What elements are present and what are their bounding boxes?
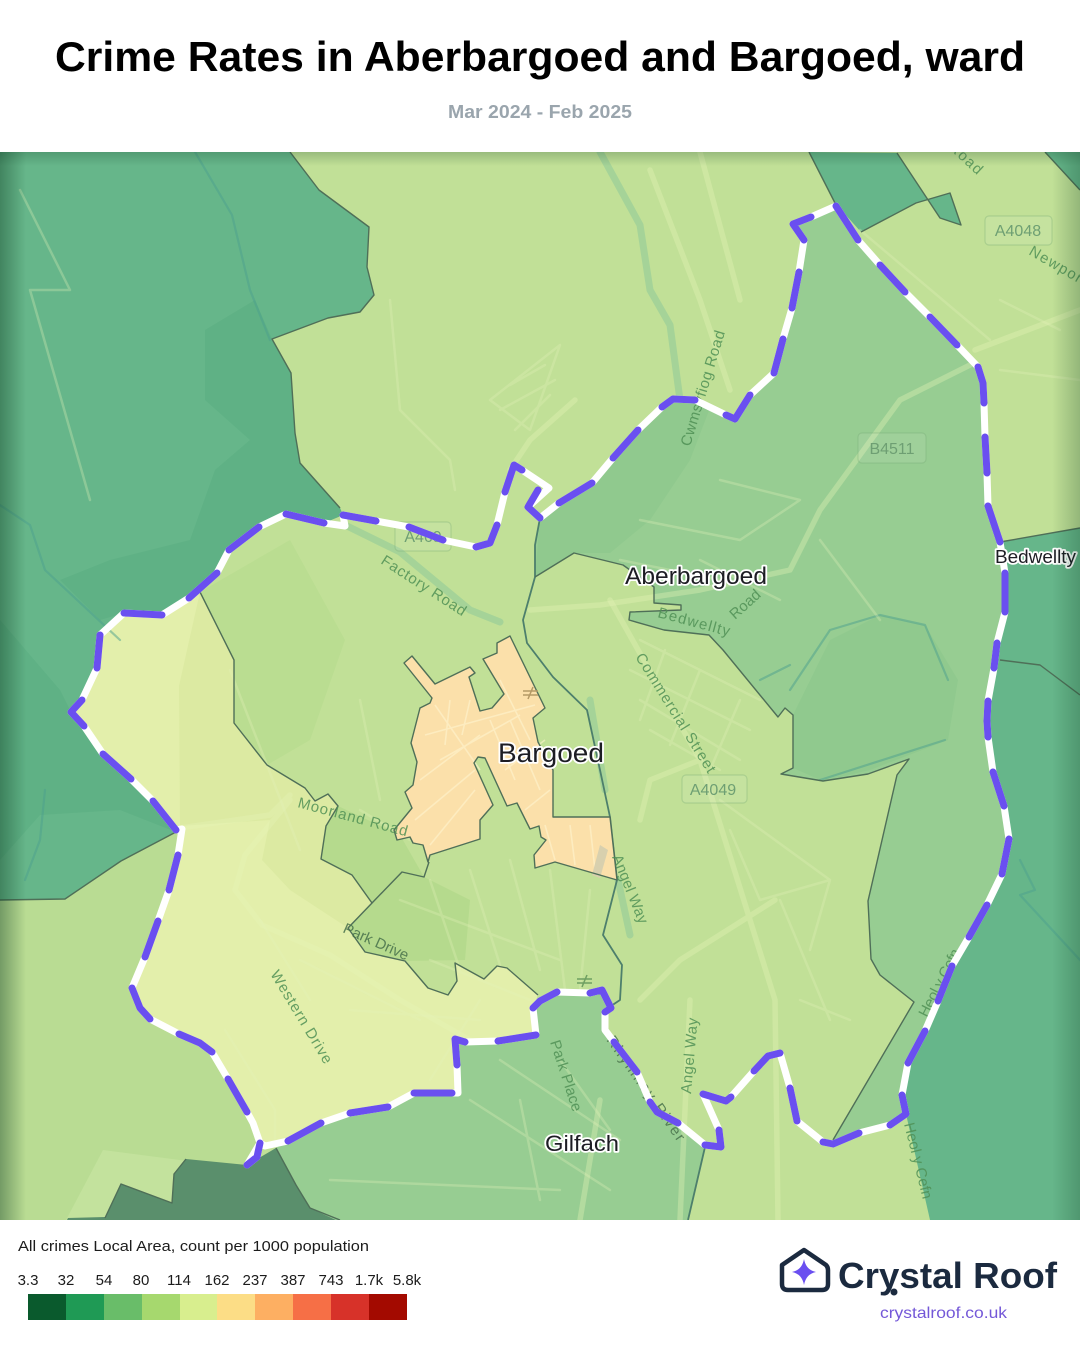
choropleth area: west pale ward [71, 592, 538, 1146]
road shield: A4049 [682, 775, 747, 803]
road network [20, 152, 1080, 1220]
road shield: B4511: B4511 [869, 441, 915, 458]
road labels: Commercial Street [632, 650, 720, 777]
choropleth area: top right woodland [809, 152, 1080, 232]
legend tick labels: 5.8k [393, 1272, 422, 1289]
legend tick labels: 80 [133, 1272, 149, 1289]
road labels [267, 138, 1080, 1201]
subtitle: date range: Mar 2024 - Feb 2025 [448, 102, 632, 122]
logo y-tail key ring [890, 1288, 898, 1296]
choropleth area: Aberbargoed ward [535, 206, 1009, 1140]
road labels: Park Drive [340, 920, 411, 964]
road labels: Angel Way [608, 852, 652, 927]
road labels: Heol y Cefn [915, 946, 964, 1020]
legend tick labels: 54 [96, 1272, 112, 1289]
icon: railway station Bargoed [523, 687, 538, 699]
logo: Crystal Roof [782, 1250, 1058, 1322]
legend tick labels: 743 [318, 1272, 344, 1289]
legend tick labels [18, 1272, 422, 1289]
choropleth area: darker woodland patch north [330, 508, 342, 520]
legend [18, 1238, 422, 1320]
road labels: Road [726, 586, 764, 623]
place label: Bargoed: Bargoed [498, 738, 604, 768]
logo wordmark: Crystal Roof [838, 1255, 1058, 1296]
place label: Aberbargoed: Aberbargoed [625, 563, 767, 590]
choropleth area: west mid strip [179, 592, 372, 928]
road shield: A4048 [985, 216, 1052, 245]
legend tick labels: 162 [204, 1272, 230, 1289]
choropleth area: darker woodland patch south [0, 620, 176, 860]
choropleth area: south dark ward [66, 1148, 345, 1222]
choropleth area: north-west woodland ward [0, 152, 374, 900]
legend title: All crimes Local Area, count per 1000 population [18, 1238, 369, 1255]
road labels: Heol y Cefn [900, 1121, 935, 1201]
ward borders [0, 152, 1080, 1220]
icon: railway station Gilfach [577, 975, 592, 987]
legend tick labels: 32 [58, 1272, 74, 1289]
ward boundary: Aberbargoed and Bargoed dashed outline [71, 206, 1009, 1165]
choropleth area: south-west ward [0, 832, 265, 1220]
road labels: Road [945, 138, 986, 178]
boundary dashes [71, 206, 1009, 1165]
road shield: A469: A469 [404, 529, 442, 546]
legend colour scale [28, 1294, 407, 1320]
road shield: A4048: A4048 [995, 223, 1041, 240]
icon: house with star [782, 1250, 828, 1290]
choropleth area: south-west pale patch [66, 1150, 184, 1220]
legend tick labels: 387 [280, 1272, 306, 1289]
road labels: Cwmsyfiog Road [678, 328, 729, 448]
place label: Gilfach: Gilfach [545, 1131, 619, 1156]
water: rivers and streams [0, 152, 1080, 1220]
choropleth area: darker Aberbargoed patches [535, 399, 958, 781]
ward: Bargoed central (highlighted orange) [394, 636, 617, 880]
road labels: Rhymney River [603, 1033, 688, 1145]
road shield: A469 [395, 522, 451, 551]
choropleth area: central darker patch [321, 806, 424, 903]
road labels: Angel Way [678, 1017, 702, 1094]
title: Crime Rates in Aberbargoed and Bargoed, ward [55, 33, 1025, 80]
road labels: Park Place [546, 1038, 585, 1114]
road labels: Moorland Road [296, 794, 410, 840]
map edge vignette [0, 152, 1080, 1220]
road labels: Factory Road [378, 552, 469, 620]
legend tick labels: 114 [167, 1272, 191, 1289]
logo url: crystalroof.co.uk [880, 1305, 1008, 1322]
choropleth area: Gilfach ward [276, 990, 705, 1222]
place label: Bedwellty: Bedwellty [995, 547, 1076, 567]
road shield: A4049: A4049 [690, 782, 736, 799]
road shield: B4511 [858, 433, 926, 463]
choropleth area: east woodland [902, 528, 1080, 1220]
road labels: Western Drive [267, 967, 336, 1067]
legend tick labels: 237 [242, 1272, 268, 1289]
road labels: Bedwellty [656, 604, 732, 640]
legend tick labels: 3.3 [18, 1272, 38, 1289]
legend tick labels: 1.7k [355, 1272, 384, 1289]
